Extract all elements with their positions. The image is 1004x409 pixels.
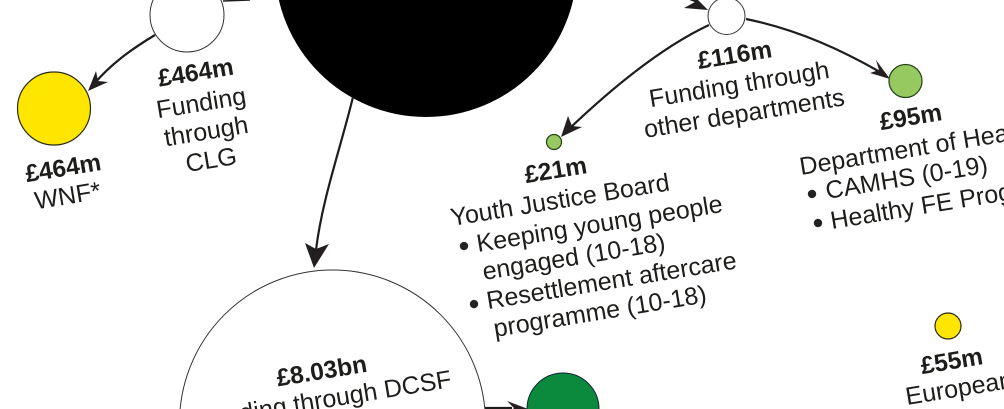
label: WNF: WNF*: [33, 177, 103, 215]
label: Department of Health: CAMHS (0-19): [823, 151, 990, 205]
circle: WNF: [18, 72, 90, 145]
label: funding through DCSF: £8.03bn: [275, 351, 369, 392]
label: funding through CLG: [154, 54, 250, 178]
arrow: CLG to WNF: [88, 35, 155, 91]
label: funding through CLG: through: [162, 111, 250, 152]
label: Youth Justice Board: £21m: [523, 152, 589, 189]
central black circle: [275, 0, 577, 117]
arrow: other departments to Youth Justice Board: [561, 25, 709, 137]
circle: funding through DCSF: [180, 270, 486, 409]
arrow: DCSF to dark green circle: [485, 401, 528, 409]
arrow: central circle to DCSF: [305, 97, 353, 268]
arrow: central circle to other departments: [660, 0, 708, 10]
label: funding through other departments: £116m: [696, 36, 774, 75]
label: WNF: £464m: [23, 149, 103, 188]
label: WNF: [23, 149, 103, 215]
label: funding through other departments: [642, 36, 847, 144]
label: funding through other departments: other departments: [642, 83, 847, 144]
label: funding through other departments: Funding through: [647, 56, 831, 113]
label: European funding: £55m: [919, 343, 985, 380]
arrow: other departments to Department of Health: [746, 19, 890, 79]
label: Youth Justice Board: [444, 131, 743, 347]
label: Department of Health: £95m: [878, 99, 944, 136]
label: Youth Justice Board: Resettlement aftercare: [484, 246, 739, 315]
label: Youth Justice Board: programme (10-18): [491, 280, 709, 343]
label: funding through CLG: Funding: [154, 82, 248, 124]
label: funding through CLG: CLG: [184, 142, 239, 178]
label: Youth Justice Board: Keeping young people: [474, 190, 725, 258]
circle: funding through other departments: [708, 0, 745, 34]
label: Youth Justice Board: engaged (10-18): [480, 228, 667, 286]
circle: Department of Health: [889, 64, 922, 98]
circle: dark green: [527, 373, 599, 409]
label: Department of Health: [793, 78, 1004, 238]
circle: funding through CLG: [150, 0, 224, 52]
circle: Youth Justice Board: [546, 134, 562, 150]
connector: central circle to CLG: [223, 0, 250, 1]
label: Youth Justice Board: Youth Justice Board: [448, 169, 672, 232]
circle: European funding: [935, 313, 961, 339]
label: funding through CLG: £464m: [156, 54, 236, 93]
label: European funding: [903, 343, 1004, 409]
